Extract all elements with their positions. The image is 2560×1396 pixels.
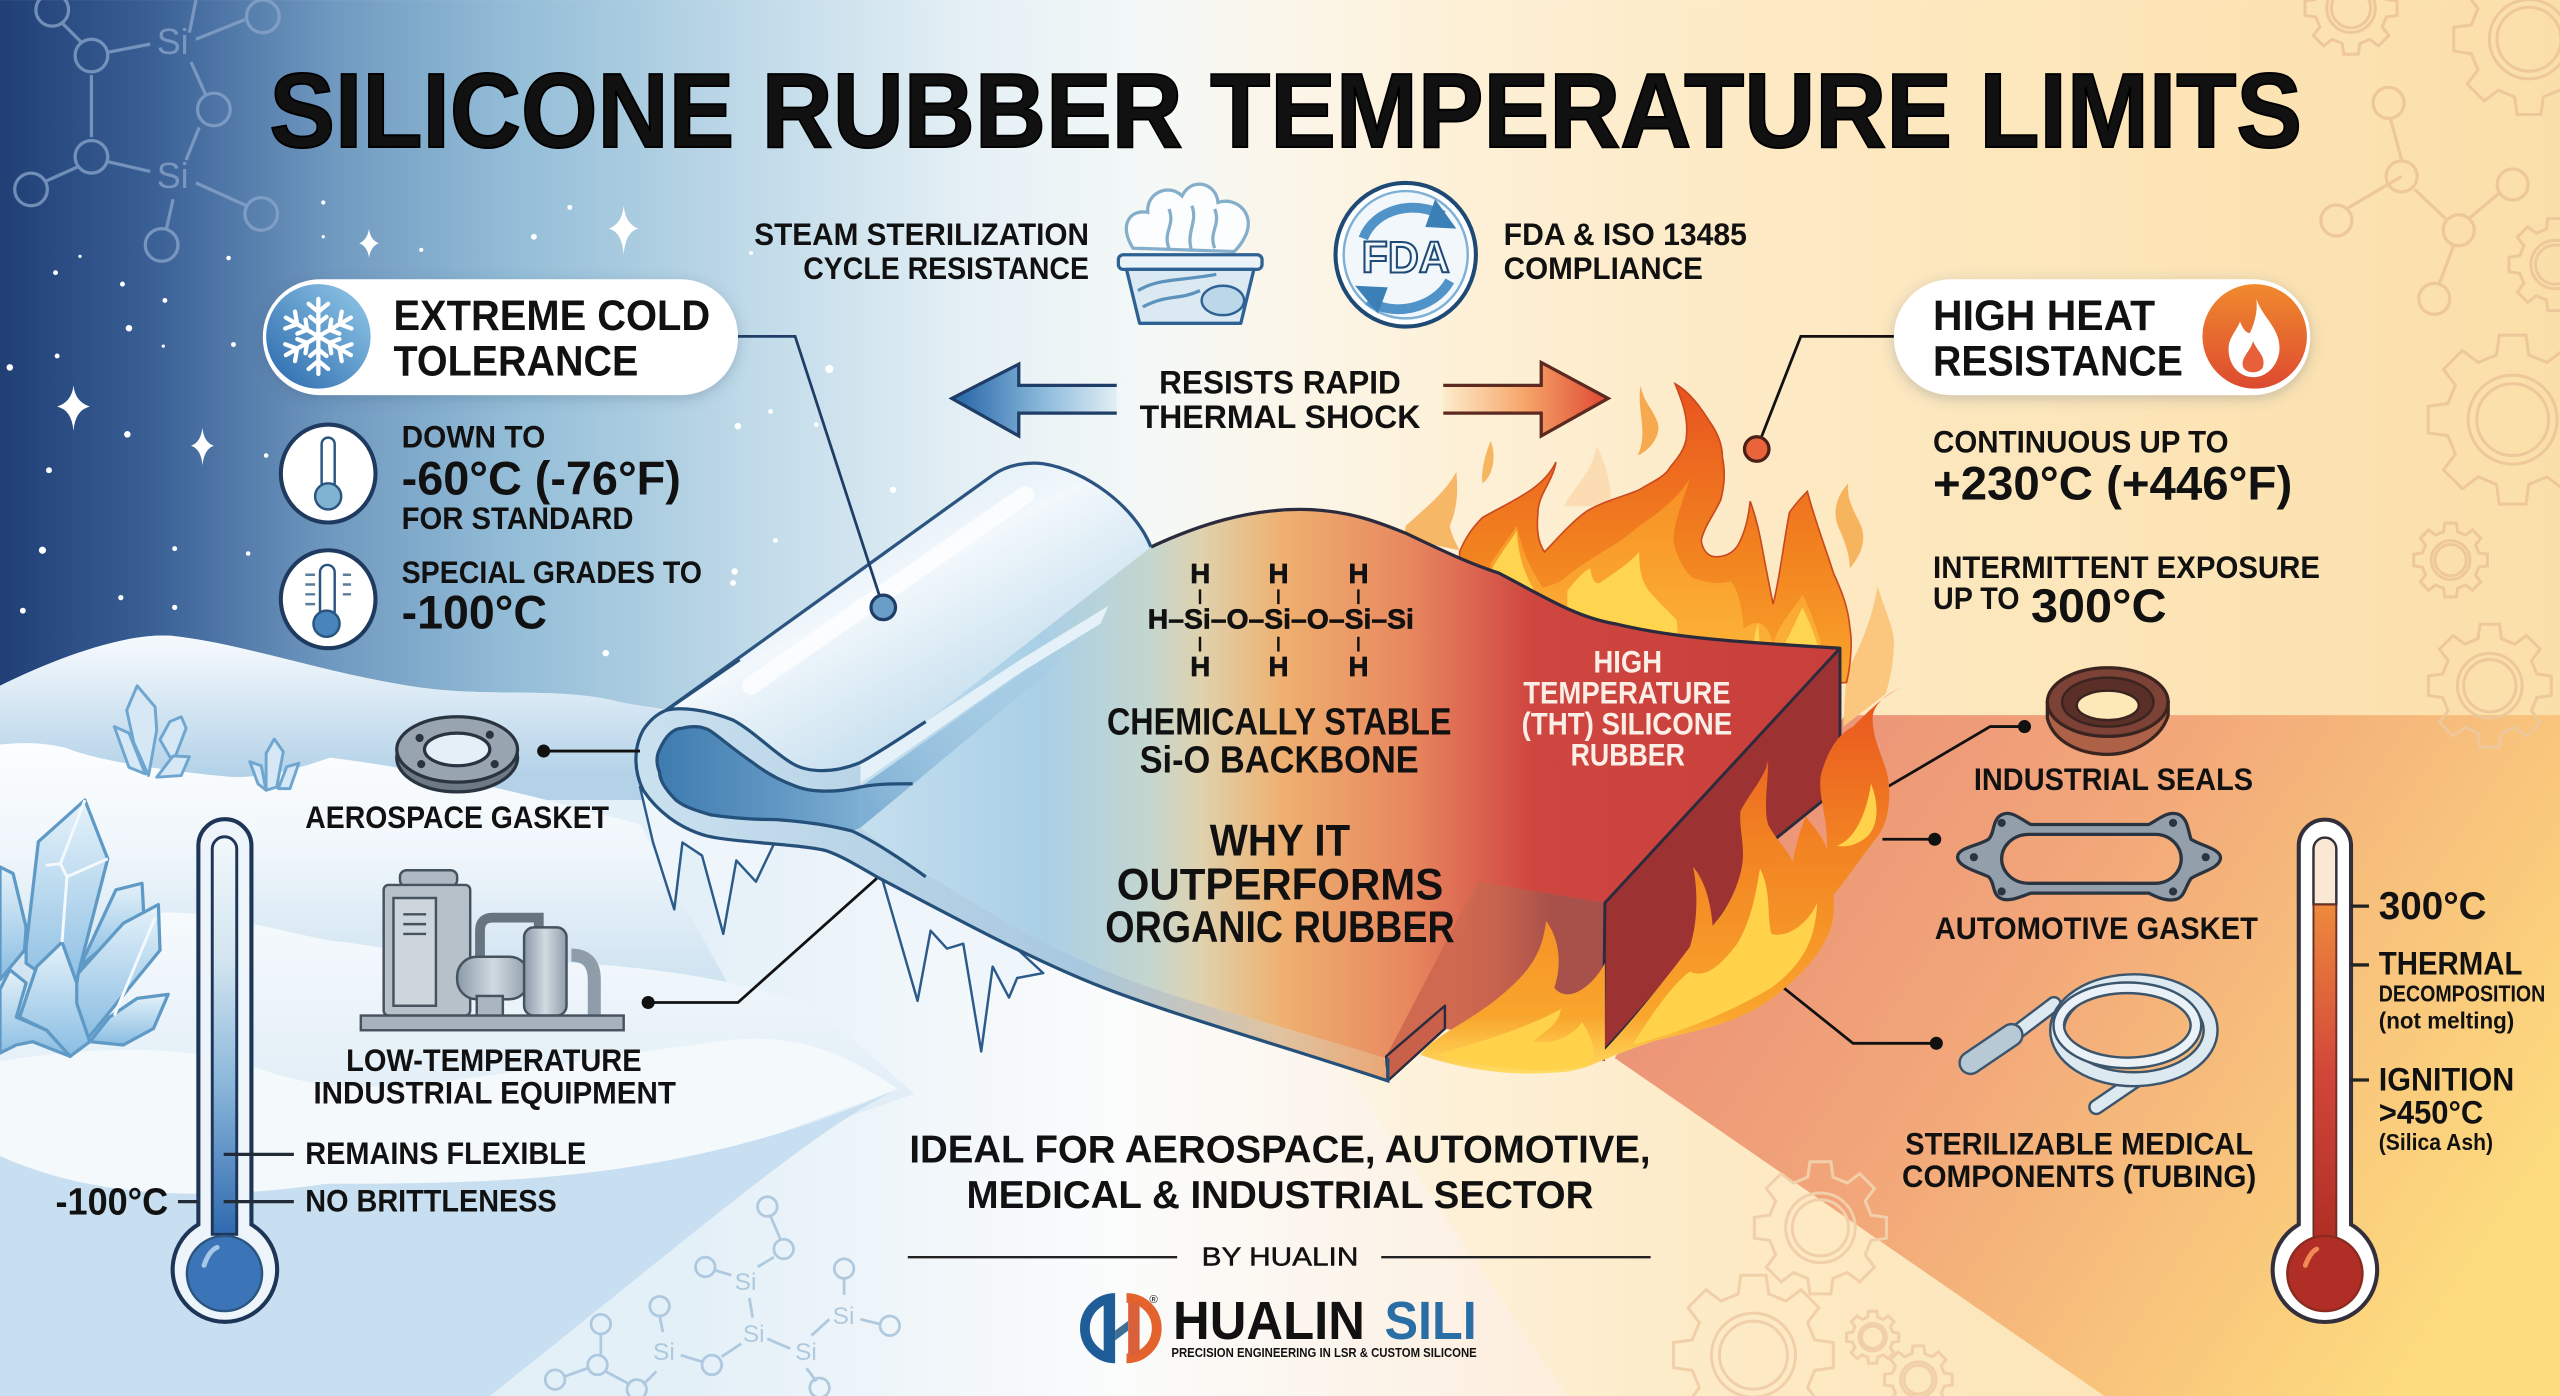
sheet: curl interior <box>657 727 860 831</box>
icon: steam sterilization tray <box>1118 184 1262 323</box>
icon: flame <box>2202 284 2307 389</box>
cold heading <box>393 292 710 385</box>
intermittent exposure text: UP TO <box>1933 581 2020 616</box>
sheet: shadow wedge below roll <box>860 612 1109 828</box>
continuous temperature text <box>1933 424 2292 511</box>
sheet: main face <box>852 509 1840 1058</box>
icicles: under sheet <box>882 877 1043 1051</box>
panel: cold pill <box>263 279 738 395</box>
steam sterilization text <box>754 217 1089 286</box>
chemical structure: H <box>1269 558 1289 589</box>
hot thermometer labels <box>2379 885 2545 1155</box>
sheet: roll outline <box>666 463 1151 710</box>
front flame yellow core <box>1437 784 1877 1070</box>
arrow cold outline <box>952 364 1117 436</box>
hot thermometer labels: (not melting) <box>2379 1008 2514 1034</box>
cold standard limit text: DOWN TO <box>402 419 545 454</box>
sectors statement <box>909 1128 1651 1217</box>
cold standard limit text: FOR STANDARD <box>402 501 633 536</box>
icon: FDA badge <box>1336 183 1476 327</box>
hot thermometer labels: >450°C <box>2379 1093 2483 1130</box>
front flames <box>1420 687 1902 1074</box>
heat heading: RESISTANCE <box>1933 338 2183 385</box>
leader dot: gasket <box>1928 833 1941 846</box>
logo: HUALIN <box>1173 1291 1365 1351</box>
steam sterilization text: STEAM STERILIZATION <box>754 217 1089 252</box>
icon: industrial seal <box>2047 668 2168 754</box>
HTV label on sheet: RUBBER <box>1571 738 1685 773</box>
title: SILICONE RUBBER TEMPERATURE LIMITS <box>269 52 2302 170</box>
cold standard limit text <box>402 419 681 536</box>
sectors statement: MEDICAL & INDUSTRIAL SECTOR <box>967 1174 1593 1217</box>
molecule pattern: bottom left <box>545 1197 900 1396</box>
hot zone panel <box>1615 715 2560 1396</box>
icon: thermometer special grades <box>281 550 376 648</box>
continuous temperature text: CONTINUOUS UP TO <box>1933 424 2229 459</box>
icon: FDA badge: FDA <box>1362 234 1450 283</box>
FDA compliance text: COMPLIANCE <box>1504 251 1703 286</box>
pale flame wisps <box>1404 385 1894 727</box>
large ice crystal cluster <box>0 800 168 1056</box>
leader dot: seal <box>2018 720 2031 733</box>
icon: industrial equipment <box>361 870 624 1030</box>
leader dot: heat <box>1744 437 1769 461</box>
icon: automotive gasket <box>1958 813 2220 900</box>
cold thermometer labels <box>56 1136 586 1223</box>
leader: cold pill to sheet <box>738 336 883 607</box>
logo: ® <box>1149 1294 1158 1306</box>
leader: aerospace gasket <box>542 750 640 752</box>
flame mid layer <box>1491 478 1820 669</box>
molecule pattern: top left: Si <box>157 21 189 62</box>
cold thermometer labels: -100°C <box>56 1181 168 1223</box>
hot thermometer labels: IGNITION <box>2379 1061 2514 1098</box>
sheet: dark under-corner <box>1440 882 1605 1061</box>
starfield <box>7 200 896 656</box>
FDA compliance text: FDA & ISO 13485 <box>1504 217 1747 252</box>
hot thermometer labels: THERMAL <box>2379 945 2522 982</box>
intermittent exposure text <box>1933 550 2320 633</box>
HTV label on sheet: (THT) SILICONE <box>1522 707 1732 742</box>
chemical structure: H <box>1349 558 1369 589</box>
icon: medical tubing <box>1971 981 2211 1107</box>
tubing label: COMPONENTS (TUBING) <box>1902 1159 2256 1194</box>
HTV label on sheet: HIGH <box>1593 645 1662 680</box>
molecule pattern: top left <box>15 0 279 261</box>
why it outperforms text: ORGANIC RUBBER <box>1105 903 1455 952</box>
leader: heat pill to flame <box>1757 336 1894 449</box>
cold heading: TOLERANCE <box>393 338 638 385</box>
icon: thermometer standard <box>281 425 376 522</box>
logo: H badge <box>1085 1298 1157 1358</box>
hot thermometer labels: 300°C <box>2379 885 2487 928</box>
automotive gasket label: AUTOMOTIVE GASKET <box>1935 911 2258 946</box>
front flame body <box>1420 687 1902 1074</box>
sheet: curl outlines <box>636 660 1388 1081</box>
panel: heat pill <box>1894 279 2310 395</box>
cold thermometer labels: REMAINS FLEXIBLE <box>305 1136 586 1171</box>
snow landscape <box>0 635 1567 1396</box>
heat heading <box>1933 292 2183 385</box>
flame yellow core <box>1491 531 1819 653</box>
why it outperforms text: WHY IT <box>1210 817 1350 866</box>
leader: equipment <box>648 878 877 1002</box>
byline: BY HUALIN <box>1202 1241 1358 1271</box>
backbone text <box>1107 701 1451 780</box>
cold thermometer <box>173 819 294 1322</box>
cold heading: EXTREME COLD <box>393 292 710 339</box>
special grades text: -100°C <box>402 587 547 640</box>
sheet: corner wedge <box>1386 1006 1445 1081</box>
hot thermometer <box>2273 820 2377 1322</box>
icicles: under curl <box>640 787 774 934</box>
chemical structure: H–Si–O–Si–O–Si–Si <box>1148 604 1414 635</box>
why it outperforms text: OUTPERFORMS <box>1117 861 1443 910</box>
special grades text <box>402 555 702 640</box>
intermittent exposure text: INTERMITTENT EXPOSURE <box>1933 550 2320 585</box>
logo: PRECISION ENGINEERING IN LSR & CUSTOM SILICONE <box>1171 1345 1477 1360</box>
molecule pattern: bottom left: Si <box>795 1339 817 1366</box>
silicone sheet <box>636 463 1840 1081</box>
sheet: wave outline <box>1151 509 1840 648</box>
gears and molecule pattern: right <box>2305 0 2560 747</box>
sparkle stars <box>57 206 638 465</box>
gears pattern: bottom centre <box>1674 1162 1952 1396</box>
cold standard limit text: -60°C (-76°F) <box>402 453 681 506</box>
chemical structure: H <box>1190 651 1210 682</box>
molecule pattern: bottom left: Si <box>653 1339 675 1366</box>
leader lines: right items <box>1780 727 2024 1043</box>
thermal shock text: THERMAL SHOCK <box>1140 398 1421 435</box>
chemical structure <box>1148 558 1414 682</box>
back flames <box>1404 384 1894 727</box>
arrow: cold direction <box>952 364 1117 436</box>
sheet: rolled lobe <box>666 463 1151 771</box>
backbone text: CHEMICALLY STABLE <box>1107 701 1451 743</box>
main flame body <box>1460 384 1851 686</box>
icon: snowflake <box>266 284 371 389</box>
molecule pattern: top left: Si <box>157 155 189 196</box>
equipment label: INDUSTRIAL EQUIPMENT <box>313 1076 676 1111</box>
sheet: right side face <box>1603 648 1840 1051</box>
arrow: heat direction <box>1443 362 1608 436</box>
FDA compliance text <box>1504 217 1747 286</box>
sectors statement: IDEAL FOR AEROSPACE, AUTOMOTIVE, <box>909 1128 1651 1171</box>
equipment label <box>313 1043 676 1111</box>
molecule pattern: bottom left: Si <box>833 1303 854 1330</box>
intermittent exposure text: 300°C <box>2031 580 2167 633</box>
small ice crystals <box>114 686 299 790</box>
sheet: under-corner base <box>1386 882 1605 1061</box>
HTV label on sheet: TEMPERATURE <box>1523 676 1731 711</box>
logo: SILI <box>1384 1291 1477 1351</box>
steam sterilization text: CYCLE RESISTANCE <box>803 251 1089 286</box>
leader dot: equipment <box>642 996 655 1009</box>
why it outperforms text <box>1105 817 1455 952</box>
backbone text: Si-O BACKBONE <box>1140 738 1419 780</box>
HTV label on sheet <box>1522 645 1732 773</box>
heat heading: HIGH HEAT <box>1933 292 2155 339</box>
sheet: highlight <box>751 495 1025 686</box>
molecule pattern: bottom left: Si <box>743 1321 765 1348</box>
tubing label <box>1902 1126 2256 1194</box>
leader dot: aerospace gasket <box>537 745 550 758</box>
continuous temperature text: +230°C (+446°F) <box>1933 458 2292 511</box>
sheet: pale crease strip <box>849 606 1109 785</box>
aerospace gasket label: AEROSPACE GASKET <box>305 800 609 835</box>
molecule pattern: bottom left: Si <box>735 1269 756 1296</box>
arrow heat outline <box>1443 362 1608 436</box>
chemical structure: H <box>1269 651 1289 682</box>
industrial seals label: INDUSTRIAL SEALS <box>1974 762 2253 797</box>
cold thermometer labels: NO BRITTLENESS <box>305 1183 557 1218</box>
hot thermometer labels: (Silica Ash) <box>2379 1129 2493 1155</box>
chemical structure: H <box>1349 651 1369 682</box>
sheet: curl band <box>636 709 1388 1081</box>
icon: aerospace gasket <box>397 717 518 792</box>
thermal shock text <box>1140 364 1421 435</box>
leader dot: tubing <box>1930 1037 1943 1050</box>
chemical structure: H <box>1190 558 1210 589</box>
equipment label: LOW-TEMPERATURE <box>346 1043 642 1078</box>
logo <box>1085 1291 1477 1360</box>
thermal shock text: RESISTS RAPID <box>1159 364 1401 401</box>
tubing label: STERILIZABLE MEDICAL <box>1905 1126 2253 1161</box>
leader dot: cold <box>871 595 896 620</box>
special grades text: SPECIAL GRADES TO <box>402 555 702 590</box>
